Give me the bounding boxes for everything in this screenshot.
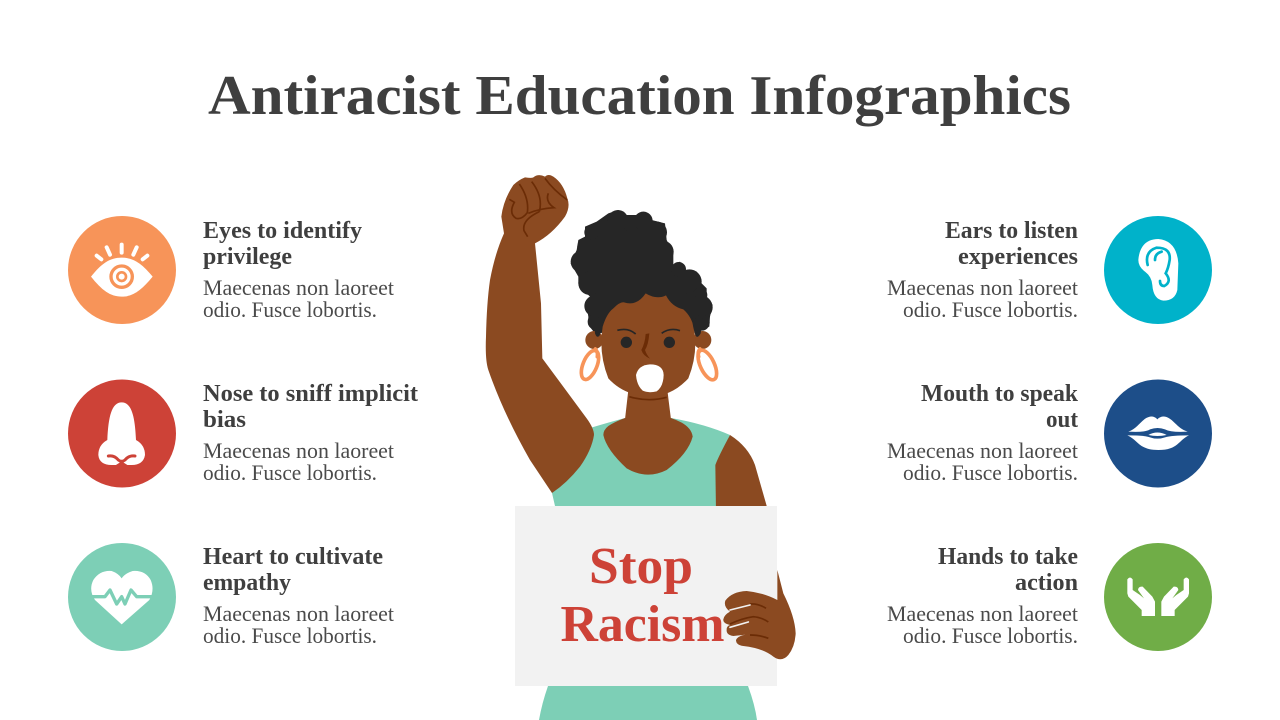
item: mouth [887, 380, 1212, 488]
body text: Maecenas non laoreet [887, 438, 1078, 463]
item: heart [68, 543, 394, 651]
item: mouth: out [1046, 407, 1078, 433]
item: ears: experiences [958, 244, 1078, 270]
title: Antiracist Education Infographics [208, 65, 1071, 127]
lowered upper arm [715, 435, 768, 512]
hair [571, 210, 713, 337]
body text: Maecenas non laoreet [887, 275, 1078, 300]
item: heart: odio. Fusce lobortis. [203, 623, 377, 648]
item: mouth: odio. Fusce lobortis. [903, 460, 1078, 485]
neck [625, 390, 671, 419]
icon: heart with pulse [68, 543, 176, 651]
icon: nose [68, 380, 176, 488]
sign board [515, 506, 777, 686]
face [601, 293, 695, 397]
heading: Eyes to identify [203, 218, 362, 244]
eyes and brows [617, 329, 680, 348]
chest and lowered arm [515, 418, 796, 686]
finger lines [730, 604, 768, 638]
item: eyes: privilege [203, 244, 292, 270]
body text: Maecenas non laoreet [887, 601, 1078, 626]
icon: ear [1104, 216, 1212, 324]
body text: Maecenas non laoreet [203, 275, 394, 300]
icon: open hands [1104, 543, 1212, 651]
item: eyes: odio. Fusce lobortis. [203, 297, 377, 322]
item: ears [887, 216, 1212, 324]
sign text: first line: Stop [589, 538, 693, 595]
body text: Maecenas non laoreet [203, 438, 394, 463]
heading: Mouth to speak [921, 381, 1079, 407]
item: heart: empathy [203, 570, 291, 596]
chin line [629, 397, 667, 400]
body text: Maecenas non laoreet [203, 601, 394, 626]
heading: Ears to listen [945, 218, 1078, 244]
nose [641, 333, 650, 359]
dress [539, 418, 757, 720]
item: nose: bias [203, 407, 246, 433]
finger gaps [730, 605, 750, 627]
item: nose: odio. Fusce lobortis. [203, 460, 377, 485]
central illustration: woman holding sign [486, 175, 796, 720]
item: hands: odio. Fusce lobortis. [903, 623, 1078, 648]
heading: Nose to sniff implicit [203, 381, 418, 407]
hair tips [593, 317, 703, 337]
sign text: second line: Racism [560, 596, 724, 653]
open mouth [636, 364, 664, 392]
earrings [578, 348, 720, 382]
item: hands [887, 543, 1212, 651]
raised arm and fist [486, 175, 594, 493]
heading: Heart to cultivate [203, 544, 383, 570]
item: ears: odio. Fusce lobortis. [903, 297, 1078, 322]
fist finger lines [509, 178, 567, 237]
heading: Hands to take [938, 544, 1078, 570]
item: hands: action [1015, 570, 1078, 596]
chest [603, 418, 693, 475]
item: nose [68, 380, 418, 488]
icon: lips [1104, 380, 1212, 488]
woman upper body [486, 175, 720, 493]
ears [585, 331, 603, 349]
icon: eye [68, 216, 176, 324]
item: eyes [68, 216, 394, 324]
holding hand [723, 570, 796, 659]
